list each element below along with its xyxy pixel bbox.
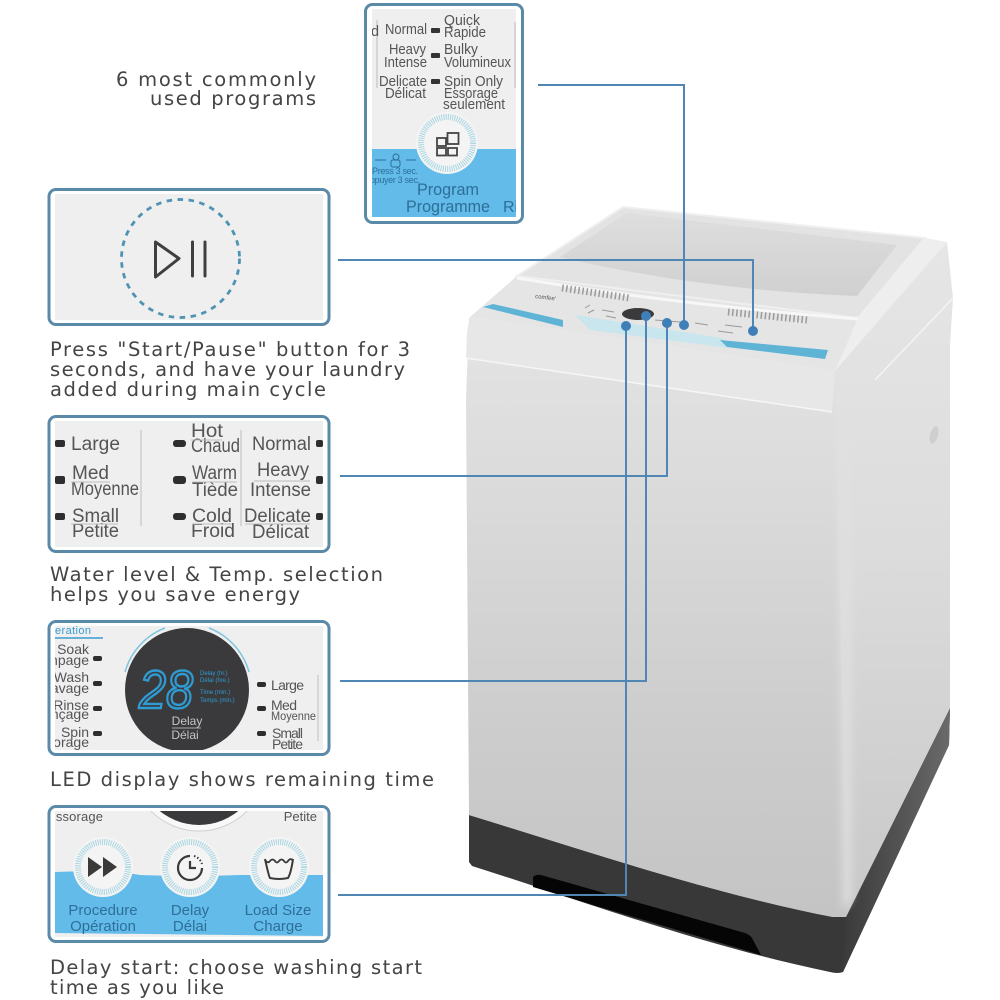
heading rule: [55, 637, 103, 639]
load labels: [272, 680, 316, 749]
washer side: [835, 242, 953, 917]
program labels: [371, 13, 512, 113]
operation labels: Rinse: [53, 697, 89, 713]
display: [622, 308, 654, 320]
top labels: Essorage: [47, 809, 103, 824]
temperature labels: Tiède: [192, 480, 238, 501]
cycle labels: Heavy: [257, 460, 309, 481]
digits: 28: [138, 660, 193, 720]
program labels: Volumineux: [444, 55, 512, 71]
partial label: Ri: [503, 199, 518, 216]
load labels: Moyenne: [271, 709, 316, 723]
operation labels: Lavage: [43, 680, 89, 696]
washer top deck: [470, 207, 947, 371]
load labels: Med: [271, 697, 297, 713]
caption: delay start: Delay start: choose washing start: [50, 956, 422, 979]
line: start pause: [338, 260, 753, 331]
operation labels: [55, 644, 89, 750]
blue area: [372, 149, 516, 217]
caption: programs: used programs: [150, 87, 316, 110]
icon: procedure button: [73, 837, 133, 897]
line: LED display: [340, 316, 646, 681]
caption: water level: [50, 563, 383, 606]
button labels: [68, 902, 311, 935]
child lock text: ppuyer 3 sec.: [370, 175, 420, 185]
temperature labels: Warm: [192, 463, 237, 484]
button labels: Délai: [173, 918, 207, 935]
operation labels: Trempage: [26, 652, 89, 668]
temperature labels: [191, 421, 240, 542]
front lip: [466, 317, 835, 412]
program labels: Essorage: [444, 86, 498, 102]
panel: start pause: [49, 190, 329, 324]
unit labels: Delay (hr.): [200, 671, 228, 677]
programme button label: Programme: [406, 197, 490, 216]
indicators: [55, 440, 323, 520]
water level labels: Small: [72, 506, 119, 527]
cycle labels: Intense: [250, 480, 311, 501]
corner highlight: [836, 415, 852, 910]
caption: start pause: [50, 338, 410, 401]
unit labels: Délai (hre.): [200, 678, 230, 684]
program labels: d: [371, 24, 379, 40]
icon: load size button: [249, 837, 309, 897]
display disc: [125, 628, 249, 752]
child lock text: [372, 168, 420, 185]
program labels: Intense: [384, 55, 427, 71]
temperature labels: Chaud: [191, 436, 240, 457]
program labels: Normal: [385, 22, 427, 38]
display fragment: [160, 811, 238, 825]
unit labels: Time (min.): [200, 690, 230, 696]
child lock text: Press 3 sec.: [372, 166, 418, 176]
operation labels: Soak: [57, 641, 90, 657]
water level labels: [71, 434, 139, 542]
brand label: comfee': [535, 294, 556, 303]
program labels: seulement: [443, 97, 505, 113]
blue band: [575, 315, 728, 348]
small panel marks: [585, 305, 742, 333]
caption: programs: [116, 68, 316, 110]
dividers: [71, 430, 310, 526]
dashed circle: [122, 200, 240, 318]
water level labels: Large: [71, 434, 120, 455]
program button label: Program: [417, 180, 479, 199]
cycle labels: Délicat: [252, 522, 310, 543]
program labels: Délicat: [385, 86, 426, 102]
caption: start pause: seconds, and have your laundry: [50, 358, 405, 381]
connector dots: [621, 311, 758, 336]
panel: programs: [366, 4, 522, 222]
operation labels: Rinçage: [38, 706, 89, 722]
icon: delay button: [160, 837, 220, 897]
unit labels: Temps (min.): [200, 698, 235, 704]
caption: water level: helps you save energy: [50, 583, 300, 606]
petite label: Petite: [284, 809, 317, 824]
program labels: Spin Only: [444, 74, 504, 90]
lid hinge rim: [835, 238, 947, 371]
operation labels: Essorage: [30, 734, 89, 750]
water level labels: Moyenne: [71, 479, 139, 500]
program labels: Rapide: [444, 25, 486, 41]
load divider: [318, 675, 319, 741]
lid front edge: [517, 278, 858, 319]
washing machine: [466, 207, 953, 973]
connector lines: [338, 85, 753, 895]
water level labels: Med: [72, 463, 109, 484]
program labels: Delicate: [379, 74, 427, 90]
operation heading: eration: [55, 625, 91, 637]
line: water temp: [340, 323, 667, 476]
caption: start pause: Press "Start/Pause" button for 3: [50, 338, 410, 361]
line: delay start: [338, 326, 626, 895]
caption: LED: LED display shows remaining time: [50, 768, 434, 791]
load indicators: [257, 682, 266, 736]
load labels: Small: [272, 725, 303, 741]
cycle labels: [244, 434, 311, 543]
icon: play pause: [156, 242, 205, 277]
caption: programs: 6 most commonly: [116, 68, 316, 91]
button labels: Procedure: [68, 902, 138, 919]
lid window: [560, 213, 897, 296]
operation labels: Wash: [54, 669, 89, 685]
program labels: Heavy: [389, 42, 427, 58]
program labels: Quick: [444, 13, 481, 29]
temperature labels: Hot: [191, 421, 224, 442]
unit labels: [200, 671, 235, 704]
delay rule: [172, 728, 201, 729]
delay label: Delay: [172, 714, 202, 728]
button labels: Charge: [253, 918, 303, 935]
line: programs: [538, 85, 684, 325]
program indicators: [431, 28, 440, 84]
dial ring: [125, 628, 249, 672]
icon: program dial: [416, 112, 478, 174]
dial fragment: [150, 811, 248, 832]
side grip: [928, 425, 940, 445]
load labels: Large: [271, 677, 304, 693]
caption: delay start: [50, 956, 422, 999]
caption: start pause: added during main cycle: [50, 378, 326, 401]
temperature labels: Cold: [192, 506, 232, 527]
panel: LED display: [26, 622, 329, 754]
front crease: [466, 358, 832, 412]
operation indicators: [93, 656, 102, 736]
cycle labels: Delicate: [244, 506, 311, 527]
cycle labels: Normal: [252, 434, 311, 455]
caption: delay start: time as you like: [50, 976, 224, 999]
panel: water level and temperature: [49, 416, 329, 552]
panel: delay start: [48, 805, 330, 943]
button labels: Load Size: [245, 902, 311, 919]
water level labels: Petite: [72, 521, 119, 542]
washer front: [466, 318, 846, 917]
washer base: [469, 708, 950, 973]
button labels: Delay: [171, 902, 210, 919]
operation labels: Spin: [61, 724, 89, 740]
right blue strip: [720, 340, 828, 359]
button labels: Opération: [70, 918, 136, 935]
left blue strip: [483, 304, 563, 327]
program labels: Bulky: [444, 42, 479, 58]
temperature labels: Froid: [191, 521, 235, 542]
icon: lock: [375, 154, 416, 167]
blue wave: [55, 871, 323, 936]
load labels: Petite: [272, 736, 303, 752]
vents: [562, 288, 807, 320]
delai label: Délai: [171, 728, 199, 742]
side crease: [875, 298, 953, 380]
caption: water level: Water level & Temp. selection: [50, 563, 383, 586]
separator lines: [377, 20, 515, 88]
lid: [517, 207, 925, 318]
